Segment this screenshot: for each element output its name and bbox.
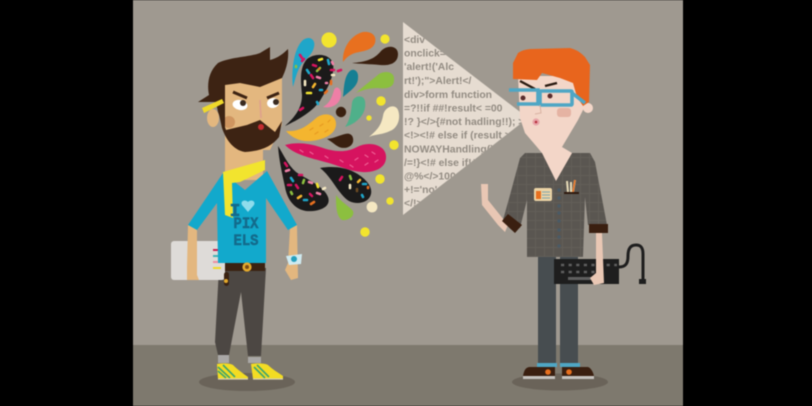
green drop: [356, 72, 394, 93]
code speech triangle: onclick=: [404, 48, 446, 60]
face: [222, 76, 282, 150]
code speech triangle: NOWAYHandling()::: [404, 144, 501, 156]
beard: [217, 105, 282, 152]
crimson swirl: [285, 143, 386, 172]
code speech triangle: <!><!# else if (result >10): [404, 130, 526, 142]
ear: [207, 109, 219, 127]
black drop lower left: [278, 146, 329, 211]
hanging arm: [590, 233, 604, 285]
eyebrows: [520, 81, 557, 89]
tablet: [171, 241, 225, 280]
buttons: [557, 188, 561, 248]
socks: [218, 355, 261, 363]
brown shoes: [523, 367, 594, 379]
cheek: [557, 108, 571, 117]
yellow sneakers with green stripes: [217, 363, 283, 379]
ground shadow: [512, 374, 608, 390]
yellow orange drop: [286, 114, 336, 141]
trousers: [215, 268, 266, 356]
code speech triangle: [403, 22, 528, 215]
shirt text: I: [230, 202, 240, 222]
blue t-shirt: [188, 171, 297, 263]
developer character: [481, 48, 646, 390]
head and neck: [518, 76, 585, 181]
cream drop: [369, 106, 399, 137]
green small drop: [336, 195, 353, 220]
colourful splash of ideas: [278, 32, 399, 237]
ID badge: [534, 188, 552, 201]
code speech triangle: @%</>100: [404, 172, 456, 182]
code speech triangle: !? }</>{#not hadling!!); >: [404, 117, 524, 128]
eyes: [232, 97, 280, 111]
black drop lower right: [320, 167, 371, 203]
black drop top: [285, 55, 333, 126]
cheek: [223, 116, 235, 128]
blue cuffs: [537, 363, 580, 367]
ear: [583, 103, 593, 113]
arms: [187, 225, 298, 280]
teal drop: [343, 70, 358, 97]
code speech triangle: =?!!if ##!result< =00: [404, 104, 503, 114]
eye pupils: [520, 94, 552, 100]
dark brown drop: [352, 47, 398, 65]
neck: [225, 135, 263, 180]
shirt text: ELS: [234, 232, 259, 250]
pencil behind ear: [202, 99, 224, 113]
shirt text: PIX: [234, 215, 259, 233]
belt with buckle: [224, 262, 265, 286]
eyebrows: [233, 92, 279, 98]
pocket with pens: [564, 180, 579, 194]
mouth: [258, 124, 264, 130]
pink drop: [323, 87, 341, 107]
orange hair: [513, 48, 590, 106]
sea green drop: [345, 96, 365, 127]
code speech triangle: 'alert!('Alc: [404, 62, 454, 73]
blue drop: [292, 38, 314, 87]
blue glasses: [509, 90, 585, 105]
hair: [198, 47, 288, 130]
illustration: designer talking to developer: [132, 0, 684, 406]
code speech triangle: </!>: [404, 198, 422, 210]
small brown drop: [327, 134, 353, 148]
brown dot and yellow dots: [321, 32, 399, 237]
code speech triangle: /=!}<!# else if!#: [404, 158, 478, 169]
crimson and orange drop texture: [300, 120, 378, 167]
mouth: [532, 118, 540, 126]
code speech triangle: +!='no': [404, 185, 437, 196]
jacket cuffs: [502, 214, 608, 233]
plaid jacket: [503, 153, 607, 257]
code speech triangle: <div: [404, 35, 425, 46]
keyboard with cable: [554, 245, 646, 284]
nose: [535, 105, 541, 114]
code speech triangle: rt!');">Alert!</: [404, 76, 472, 87]
raised arm: [481, 184, 508, 232]
designer character: [171, 47, 302, 391]
heart on shirt: [242, 201, 254, 212]
shirt text: [230, 202, 259, 250]
wrist watch: [286, 254, 302, 265]
code speech triangle: div>form function: [404, 90, 492, 101]
nose: [260, 100, 261, 118]
confetti sprinkles: [285, 55, 368, 204]
yellow scarf: [223, 160, 265, 218]
ground shadow: [199, 373, 295, 391]
trousers: [538, 257, 578, 363]
orange drop: [343, 32, 375, 62]
